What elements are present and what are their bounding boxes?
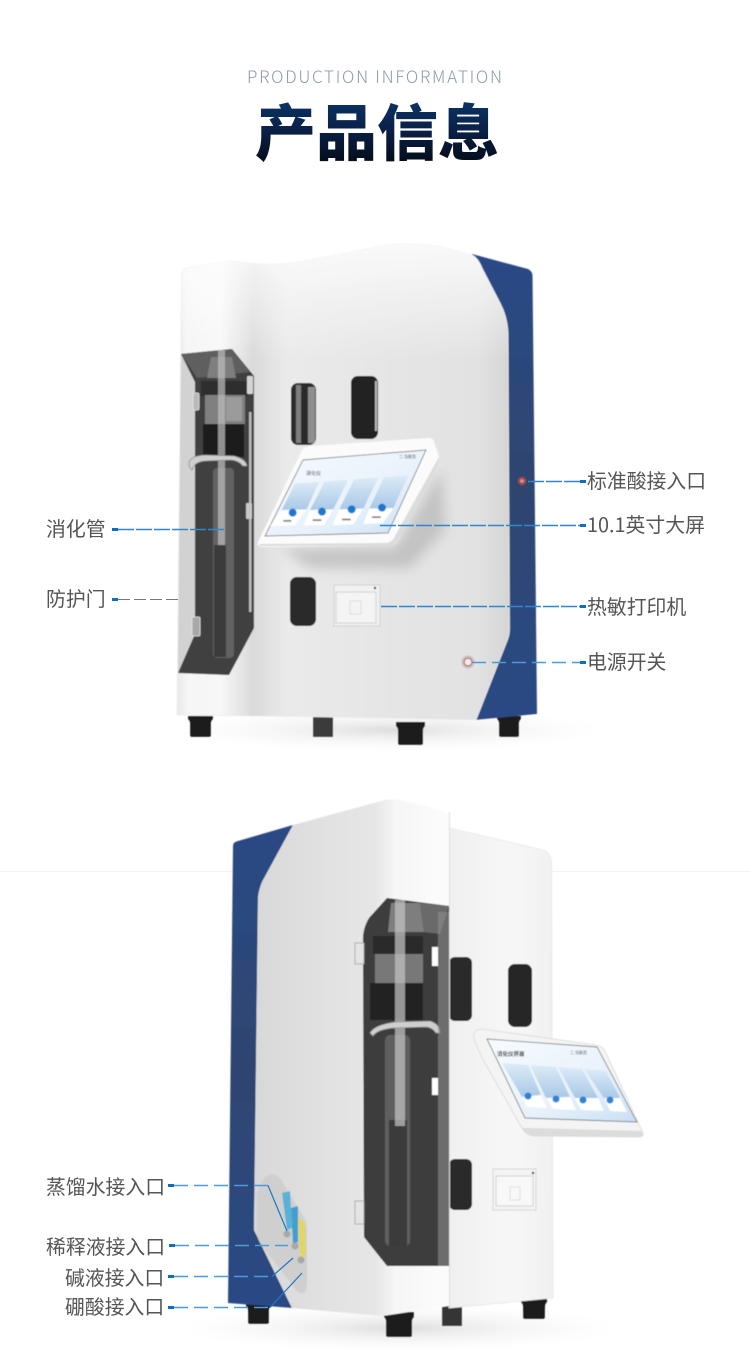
side panel [449, 828, 553, 1308]
callout: 电源开关: 电源开关 [587, 646, 667, 675]
callout: 防护门: 防护门 [46, 583, 106, 612]
callout: 蒸馏水接入口: 蒸馏水接入口 [46, 1171, 165, 1200]
touch screen [474, 1029, 643, 1137]
faint horizon line [0, 871, 750, 872]
standard acid inlet [518, 477, 526, 485]
window right [508, 964, 532, 1027]
feet [246, 1298, 547, 1337]
digestion tube and condenser [189, 350, 253, 658]
callout: 标准酸接入口: 标准酸接入口 [587, 465, 706, 494]
window near door [449, 957, 472, 1021]
printer [493, 1169, 536, 1210]
floor shadow [150, 1302, 650, 1354]
callout: 碱液接入口 [65, 1258, 293, 1291]
front body edge [449, 812, 450, 1308]
touch screen: 消化仪界面 [497, 1050, 525, 1058]
callout: 电源开关 [472, 646, 667, 675]
machine 1: front view [150, 244, 630, 754]
callout: 热敏打印机: 热敏打印机 [587, 591, 686, 620]
machine 2: rear side view [150, 799, 650, 1354]
viewing window right [351, 376, 378, 439]
callout: 硼酸接入口 [65, 1273, 302, 1320]
blue back panel [228, 825, 293, 1308]
viewing window left [291, 383, 316, 445]
door: digestion compartment [355, 898, 449, 1266]
callout: 消化管: 消化管 [46, 513, 106, 542]
screen cards [270, 475, 408, 526]
lower window [449, 1159, 472, 1210]
door hinges [355, 943, 364, 964]
white front body [254, 799, 449, 1316]
printer [334, 585, 380, 626]
title: 产品信息 [255, 84, 499, 173]
feet [188, 715, 521, 745]
screen shadow [280, 470, 445, 568]
floor shadow [150, 706, 630, 754]
callout: 10.1英寸大屏: 10.1英寸大屏 [587, 509, 705, 538]
callout: 标准酸接入口 [528, 465, 706, 494]
callout: 硼酸接入口: 硼酸接入口 [65, 1291, 164, 1320]
callout: 热敏打印机 [381, 591, 686, 620]
door: digestion compartment [178, 349, 254, 675]
callout: 防护门 [46, 583, 178, 612]
touch screen [258, 438, 439, 547]
reagent inlet bay [257, 1174, 307, 1293]
callout: 碱液接入口: 碱液接入口 [65, 1262, 164, 1291]
callout: 稀释液接入口 [46, 1231, 288, 1260]
lower window [290, 577, 316, 626]
subtitle: PRODUCTION INFORMATION [247, 63, 502, 88]
touch screen: 二 当前页 [399, 453, 416, 460]
touch screen: 消化仪 [306, 470, 321, 477]
power switch [462, 656, 474, 668]
callout: 10.1英寸大屏 [380, 509, 705, 538]
white body [177, 244, 510, 720]
screen cards [502, 1063, 627, 1112]
digestion tube and condenser [370, 900, 449, 1266]
touch screen: 二 当前页 [570, 1049, 587, 1056]
callout: 稀释液接入口: 稀释液接入口 [46, 1231, 165, 1260]
blue back panel [472, 254, 537, 720]
callout: 消化管 [46, 513, 224, 542]
callout: 蒸馏水接入口 [46, 1171, 287, 1231]
